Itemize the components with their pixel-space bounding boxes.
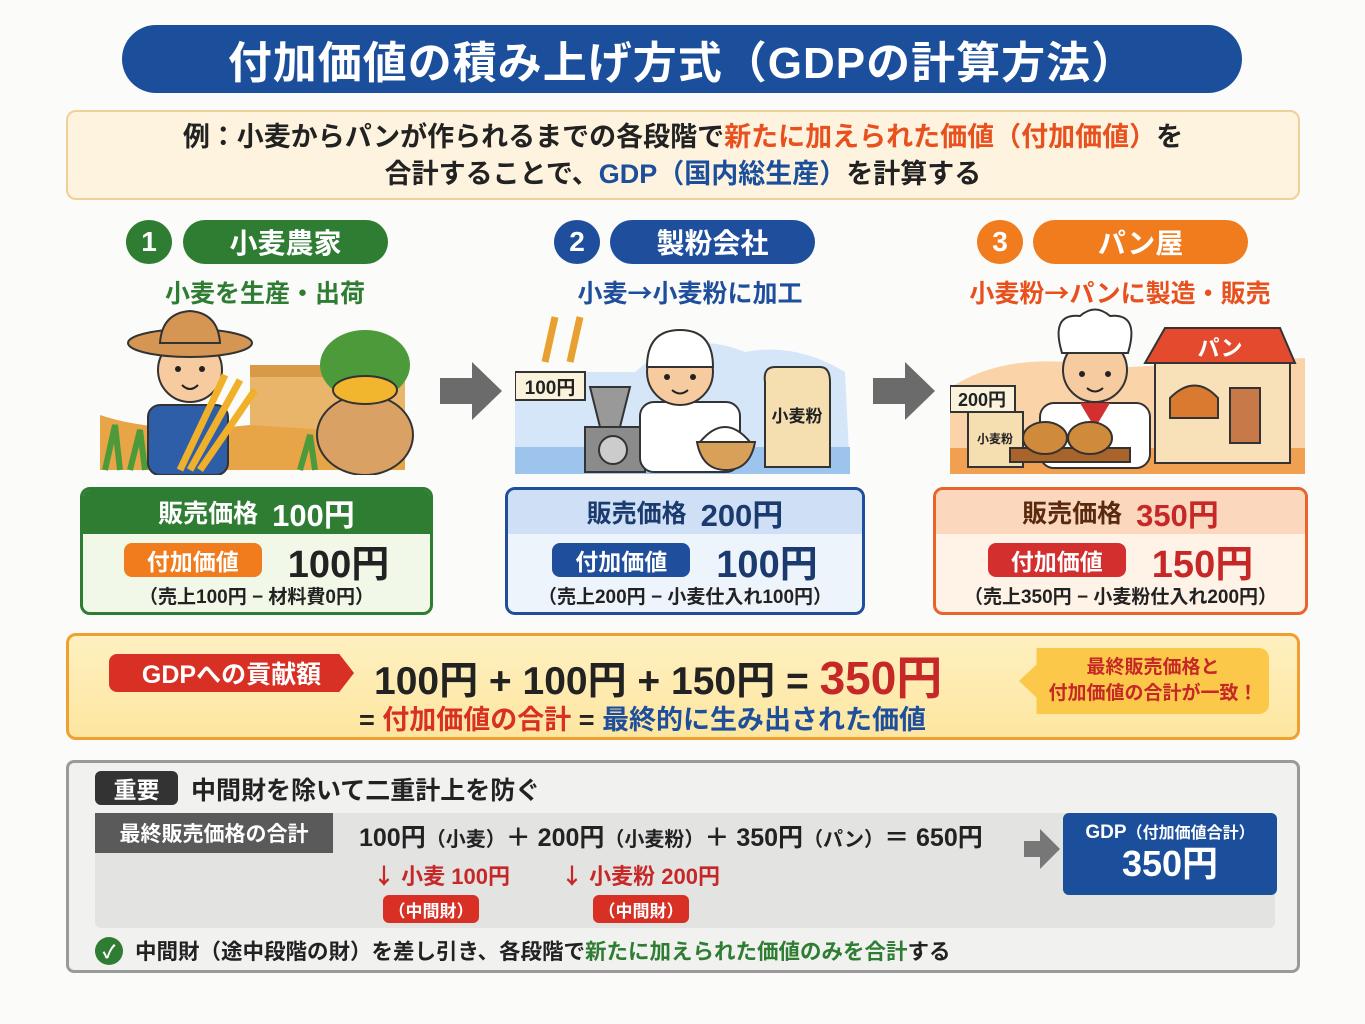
header band 1: 100円 [272, 498, 355, 532]
gray band [95, 813, 1275, 928]
header band 2: 販売価格 [587, 500, 687, 528]
pill 小麦農家: 小麦農家 [229, 228, 342, 259]
heading: 中間財を除いて二重計上を防ぐ [191, 777, 540, 805]
intermediate item: wheat [373, 859, 510, 923]
value row 2: 100円 [716, 544, 818, 586]
arrow to GDP [1024, 829, 1060, 869]
GDP contribution panel [66, 633, 1300, 740]
arrow 1 [440, 362, 502, 420]
illustration: bakery: 小麦粉 [977, 431, 1013, 446]
callout: 付加価値の合計が一致！ [1048, 683, 1258, 704]
conclusion with check icon: 新たに加えられた価値のみを合計 [585, 940, 908, 964]
label tag GDPへの貢献額: GDPへの貢献額 [142, 661, 321, 689]
pill パン屋 [1033, 220, 1248, 264]
step 1 subtitle: 小麦を生産・出荷 [165, 280, 365, 308]
formula 1: （売上100円 − 材料費0円） [139, 587, 374, 608]
arrow 2 [873, 362, 935, 420]
step 3 header [977, 220, 1248, 264]
GDP result box: 350円 [1122, 843, 1218, 884]
badge 1 [126, 220, 172, 264]
value row 2: 付加価値 [575, 549, 667, 575]
formula 3: （売上350円 − 小麦粉仕入れ200円） [964, 587, 1277, 608]
label tag GDPへの貢献額 [109, 654, 354, 692]
intermediate item: wheat: ↓ 小麦 100円 [373, 859, 510, 891]
pill パン屋: パン屋 [1098, 228, 1183, 259]
intermediate item: flour: （中間財） [598, 902, 684, 920]
value row 3: 150円 [1152, 544, 1253, 586]
illustration: mill [515, 316, 850, 474]
conclusion with check icon: ✓ [102, 942, 116, 962]
title: 付加価値の積み上げ方式（GDPの計算方法） [228, 39, 1136, 88]
step 2 header [554, 220, 815, 264]
illustration: bakery: 200円 [958, 390, 1006, 410]
header band 2: 200円 [701, 498, 783, 532]
callout [1019, 648, 1269, 714]
step 3 subtitle: 小麦粉→パンに製造・販売 [969, 274, 1271, 310]
badge 3: 3 [992, 226, 1008, 257]
header band 1 [83, 490, 430, 534]
conclusion with check icon: 中間財（途中段階の財）を差し引き、各段階で する [135, 940, 951, 964]
header band 1: 販売価格 [158, 500, 258, 528]
value row 3 [988, 543, 1253, 586]
badge 2: 2 [569, 226, 585, 257]
equation: 100円 + 100円 + 150円 = 350円 [374, 652, 942, 704]
badge 1: 1 [141, 226, 157, 257]
GDP result box [1063, 813, 1277, 895]
pill 製粉会社 [610, 220, 815, 264]
GDP result box: GDP（付加価値合計） [1085, 822, 1255, 843]
intro text box: 例：小麦からパンが作られるまでの各段階で新たに加えられた価値（付加価値）を [183, 122, 1183, 152]
pill 製粉会社: 製粉会社 [656, 228, 768, 259]
header band 3 [936, 490, 1305, 534]
tag 重要 [95, 771, 178, 805]
price box 1 [80, 487, 433, 615]
illustration: bakery: パン [1197, 336, 1243, 361]
formula 2: （売上200円 − 小麦仕入れ100円） [538, 587, 832, 608]
equation second line: = 付加価値の合計 = 最終的に生み出された価値 [359, 705, 926, 735]
badge 3 [977, 220, 1023, 264]
illustration: mill: 100円 [525, 378, 575, 399]
tag 重要: 重要 [114, 777, 160, 803]
header band 3: 350円 [1136, 498, 1219, 532]
intermediate item: wheat: （中間財） [388, 902, 474, 920]
value row 3: 付加価値 [1011, 549, 1103, 575]
value row 1 [124, 543, 389, 586]
value row 1: 付加価値 [147, 549, 239, 575]
step 2 subtitle: 小麦→小麦粉に加工 [577, 274, 803, 310]
callout: 最終販売価格と [1086, 657, 1220, 678]
header band 3: 販売価格 [1022, 500, 1122, 528]
pill 小麦農家 [183, 220, 388, 264]
intermediate item: flour [561, 859, 720, 923]
title [122, 25, 1242, 93]
intermediate item: flour: ↓ 小麦粉 200円 [561, 859, 720, 891]
value row 2 [552, 543, 818, 586]
intro text box [66, 110, 1300, 200]
sum row: 100円（小麦）＋ 200円（小麦粉）＋ 350円（パン）＝ 650円 [359, 824, 983, 852]
illustration: mill: 小麦粉 [772, 407, 822, 426]
illustration: farmer [100, 310, 414, 475]
header band 2 [508, 490, 862, 534]
price box 2 [505, 487, 865, 615]
badge 2 [554, 220, 600, 264]
price box 3 [933, 487, 1308, 615]
illustration: bakery [950, 308, 1305, 474]
intro text box: 合計することで、GDP（国内総生産）を計算する [385, 159, 981, 189]
value row 1: 100円 [288, 544, 389, 586]
bottom panel: double counting [66, 760, 1300, 973]
label 最終販売価格の合計: 最終販売価格の合計 [120, 823, 308, 846]
step 1 header [126, 220, 388, 264]
label 最終販売価格の合計 [95, 813, 333, 853]
